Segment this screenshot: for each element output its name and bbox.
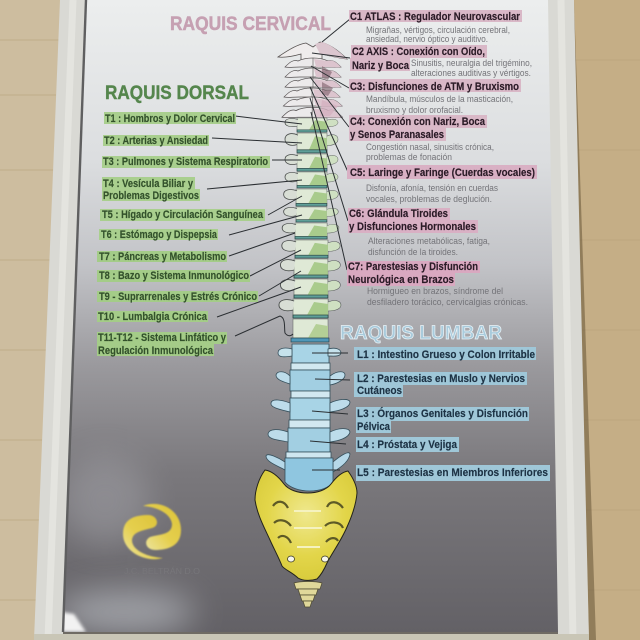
- label C7: [347, 261, 528, 307]
- label T11-T12: T11-T12 - Sistema Linfático y: [98, 332, 226, 344]
- title: raquis cervical: RAQUIS CERVICAL: [170, 14, 331, 35]
- panel: lumbar labels: [354, 347, 550, 481]
- title: raquis dorsal: RAQUIS DORSAL: [105, 83, 249, 104]
- label C5: [347, 165, 537, 204]
- label T11-T12: [97, 332, 227, 357]
- label C2: [350, 45, 532, 78]
- label T9: T9 - Suprarrenales y Estrés Crónico: [99, 291, 257, 303]
- spine illustration: [255, 42, 357, 607]
- sacrum: [255, 470, 357, 580]
- logo caption: J.C. BELTRÁN D.O: [124, 567, 200, 576]
- label C6: disfunción de la tiroides.: [368, 247, 458, 257]
- label L4: L4 : Próstata y Vejiga: [357, 439, 457, 451]
- label C7: Hormigueo en brazos, síndrome del: [367, 286, 503, 296]
- label C4: [349, 115, 494, 162]
- label C1: Migrañas, vértigos, circulación cerebral,: [366, 25, 510, 35]
- label T4: [102, 177, 200, 202]
- label C1: C1 ATLAS : Regulador Neurovascular: [350, 11, 520, 23]
- label C4: y Senos Paranasales: [350, 129, 444, 141]
- label C3: C3: Disfunciones de ATM y Bruxismo: [350, 81, 519, 93]
- label L5: L5 : Parestesias en Miembros Inferiores: [357, 467, 548, 479]
- label C5: C5: Laringe y Faringe (Cuerdas vocales): [350, 167, 535, 179]
- logo: [123, 504, 200, 576]
- label T1: T1 : Hombros y Dolor Cervical: [105, 113, 235, 125]
- label C6: Alteraciones metabólicas, fatiga,: [368, 236, 490, 246]
- label C1: [349, 10, 522, 44]
- label T4: T4 : Vesícula Biliar y: [103, 178, 193, 190]
- label C6: [348, 208, 490, 257]
- label C2: Sinusitis, neuralgia del trigémino,: [411, 58, 532, 68]
- label T7: T7 : Páncreas y Metabolismo: [99, 251, 226, 263]
- poster paper panel: [55, 0, 558, 634]
- label T6: T6 : Estómago y Dispepsia: [101, 229, 217, 241]
- label L3: L3 : Órganos Genitales y Disfunción: [357, 407, 528, 420]
- panel: dorsal labels: [97, 112, 270, 357]
- label C2: C2 AXIS : Conexión con Oído,: [352, 46, 485, 58]
- leader lines: lumbar: [310, 353, 350, 470]
- label L3: [356, 407, 529, 433]
- label C7: desfiladero torácico, cervicalgias crónicas.: [367, 297, 528, 307]
- panel: cervical labels: [347, 10, 537, 307]
- label C4: Congestión nasal, sinusitis crónica,: [366, 142, 494, 152]
- label C5: Disfonía, afonía, tensión en cuerdas: [366, 183, 499, 193]
- icon: logo swirl: [123, 504, 181, 559]
- label C1: ansiedad, nervio óptico y auditivo.: [366, 34, 488, 44]
- label C4: C4: Conexión con Nariz, Boca: [350, 116, 485, 128]
- label T5: T5 : Hígado y Circulación Sanguínea: [102, 209, 263, 221]
- label T4: Problemas Digestivos: [103, 190, 199, 202]
- label T8: T8 : Bazo y Sistema Inmunológico: [99, 270, 249, 282]
- label C5: vocales, problemas de deglución.: [366, 194, 492, 204]
- label L2: L2 : Parestesias en Muslo y Nervios: [357, 373, 525, 385]
- label T10: T10 - Lumbalgia Crónica: [98, 311, 207, 323]
- leader lines: dorsal: [207, 116, 302, 336]
- leader lines: cervical: [310, 19, 350, 270]
- label C7: Neurológica en Brazos: [348, 274, 454, 286]
- label T2: T2 : Arterias y Ansiedad: [104, 135, 208, 147]
- label C7: C7: Parestesias y Disfunción: [348, 261, 478, 273]
- label C3: [349, 79, 521, 115]
- label C6: y Disfunciones Hormonales: [349, 221, 476, 233]
- lumbar vertebrae: [266, 344, 350, 491]
- label L2: [354, 372, 527, 397]
- title: raquis lumbar: RAQUIS LUMBAR: [340, 323, 502, 344]
- label L1: L1 : Intestino Grueso y Colon Irritable: [357, 349, 535, 361]
- label C2: alteraciones auditivas y vértigos.: [411, 68, 531, 78]
- label T3: T3 : Pulmones y Sistema Respiratorio: [103, 156, 268, 168]
- label C4: problemas de fonación: [366, 152, 452, 162]
- label C6: C6: Glándula Tiroides: [349, 208, 448, 220]
- label T11-T12: Regulación Inmunológica: [98, 345, 213, 357]
- thoracic vertebrae: [279, 118, 341, 342]
- label L2: Cutáneos: [357, 385, 402, 397]
- label C3: Mandíbula, músculos de la masticación,: [366, 94, 513, 104]
- label L3: Pélvica: [357, 421, 390, 433]
- label C3: bruxismo y dolor orofacial.: [366, 105, 463, 115]
- coccyx: [294, 582, 322, 607]
- label C2: Nariz y Boca: [352, 60, 409, 72]
- cervical vertebrae: [278, 42, 347, 118]
